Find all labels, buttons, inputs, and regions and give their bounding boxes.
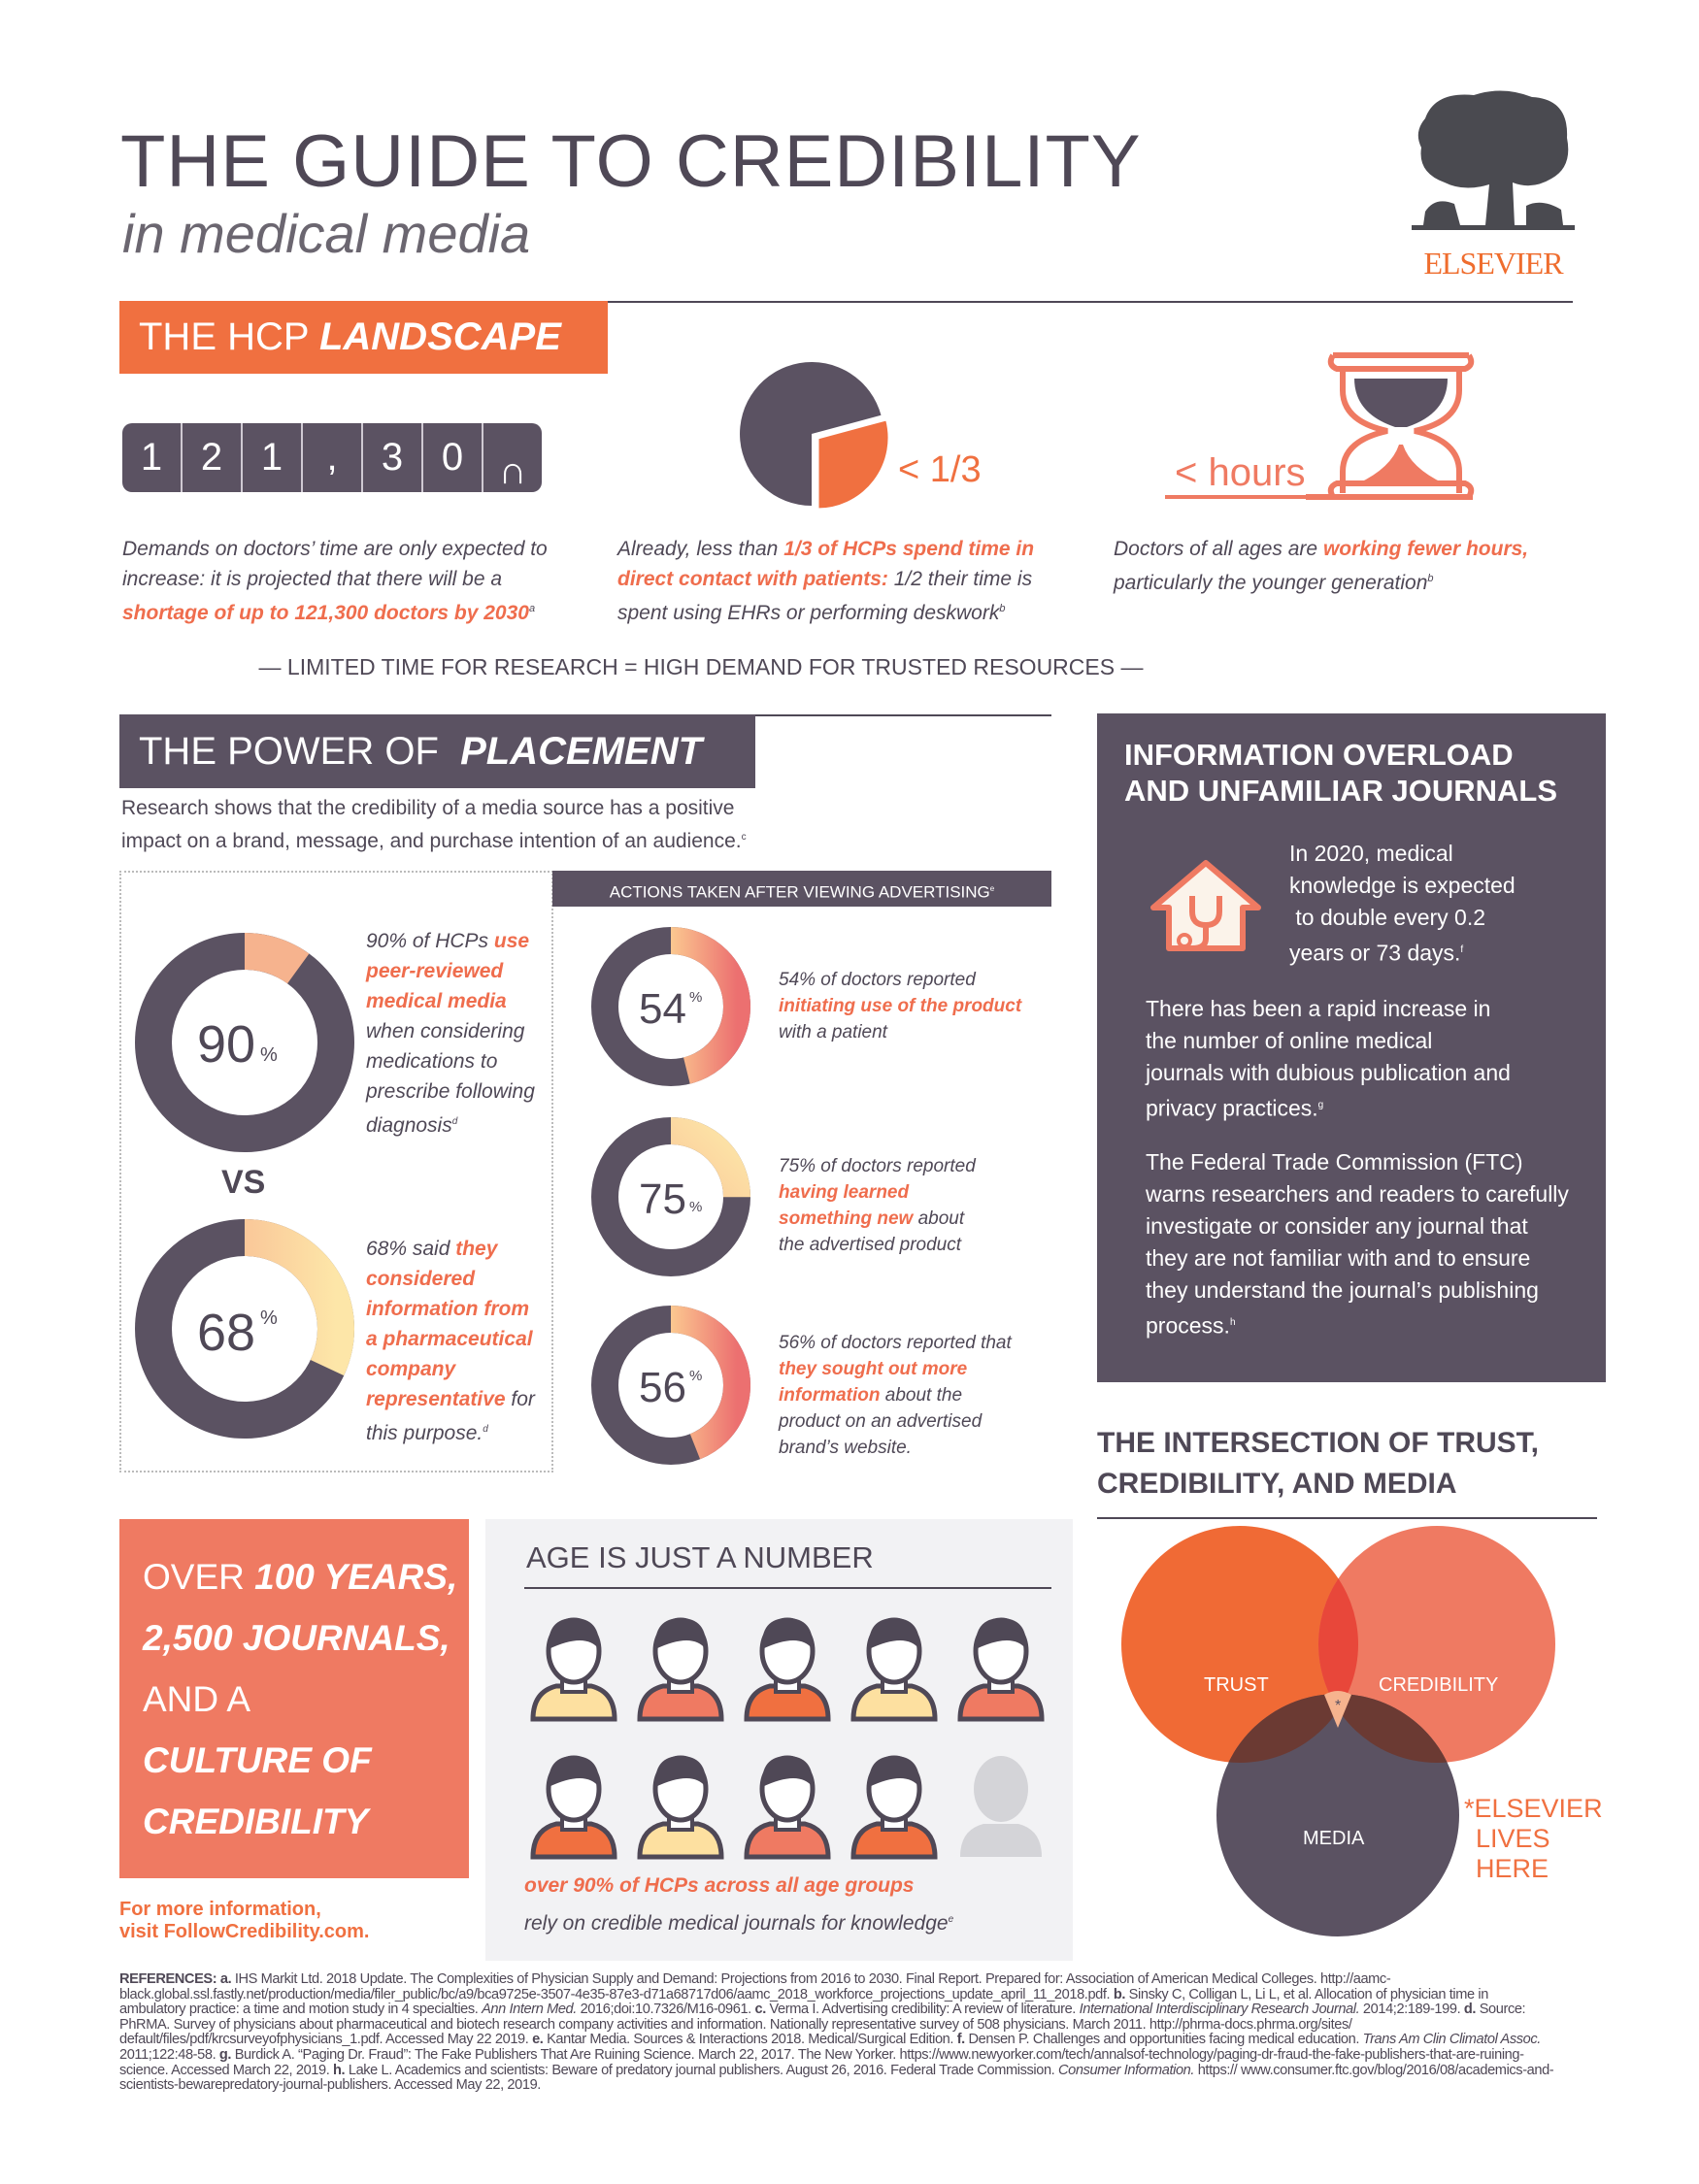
counter: 121,300: ,	[326, 436, 338, 479]
venn diagram	[1121, 1526, 1603, 1936]
venn diagram: LIVES	[1476, 1824, 1550, 1853]
venn diagram: CREDIBILITY	[1379, 1674, 1498, 1696]
text: over 90%	[524, 1874, 953, 1935]
text: direct contact: Already, less than 1/3 of HCPs spend time in direct contact with patients: 1/2 their time is spent using EHRs or performing deskworkb	[617, 538, 1034, 624]
donut: 68%	[135, 1219, 354, 1439]
donut: 54%: 54	[639, 985, 686, 1033]
text: dubious journals: There has been a rapid increase in the number of online medical journals with dubious publication and privacy practices.g	[1146, 996, 1511, 1121]
panel: age is just a number	[485, 1519, 1073, 1961]
text: 56%: 56% of doctors reported that they sought out more information about the product on an advertised brand’s website.	[779, 1333, 1012, 1458]
venn diagram: *ELSEVIER	[1464, 1794, 1603, 1823]
venn diagram: HERE	[1476, 1854, 1549, 1883]
header: actions taken: ACTIONS TAKEN AFTER VIEWING ADVERTISINGe	[610, 883, 994, 902]
heading: information overload: AND UNFAMILIAR JOURNALS	[1124, 774, 1557, 808]
text: fewer hours: Doctors of all ages are working fewer hours, particularly the younger generationb	[1114, 538, 1528, 594]
donut: 68%: 68	[197, 1304, 255, 1362]
donut: 56%	[591, 1306, 750, 1465]
subtitle: in medical media	[122, 203, 530, 264]
counter: 121,300: 1	[141, 436, 162, 479]
heading: information overload: INFORMATION OVERLOAD	[1124, 738, 1514, 772]
counter: 121,300: 2	[201, 436, 222, 479]
counter: 121,300: 0	[442, 436, 463, 479]
label: vs: VS	[221, 1164, 265, 1201]
banner: the hcp landscape: THE HCP LANDSCAPE	[139, 315, 561, 358]
banner: the hcp landscape	[119, 301, 608, 374]
banner: power of placement: THE POWER OF PLACEMENT	[139, 730, 702, 773]
panel: information overload	[1097, 713, 1606, 1382]
panel: over 100 years	[119, 1519, 469, 1878]
donut: 68%: %	[260, 1307, 278, 1329]
donut: 75%: 75	[639, 1175, 686, 1223]
donut: 90%: %	[260, 1044, 278, 1066]
venn diagram: *	[1335, 1698, 1341, 1714]
text: 90%: 90% of HCPs use peer-reviewed medical media when considering medications to prescribe following diagnosisd	[366, 930, 535, 1137]
text: more info: For more information,	[119, 1899, 321, 1920]
text: more info: visit FollowCredibility.com.	[119, 1921, 369, 1942]
panel: over 100 years: OVER 100 YEARS,	[143, 1557, 457, 1597]
icon: hourglass with less hours	[1165, 352, 1474, 500]
donut: 90%	[135, 933, 354, 1152]
heading: intersection: THE INTERSECTION OF TRUST, CREDIBILITY, AND MEDIA	[1097, 1427, 1539, 1500]
logo: elsevier: ELSEVIER	[1423, 246, 1563, 281]
counter: 121,300	[122, 423, 542, 492]
panel: over 100 years: CREDIBILITY	[143, 1802, 368, 1841]
icon: house with stethoscope	[1150, 860, 1261, 951]
text: ftc warning: The Federal Trade Commission (FTC) warns researchers and readers to carefully investigate or consider any journal that they are not familiar with and to ensure they understand the journal’s publishing process.h	[1146, 1149, 1569, 1339]
heading: age: AGE IS JUST A NUMBER	[526, 1540, 874, 1574]
text: over 90%: rely on credible medical journals for knowledgee	[524, 1912, 953, 1935]
donut: 56%: 56	[639, 1364, 686, 1411]
text: doctor shortage: Demands on doctors’ time are only expected to increase: it is projected that there will be a shortage of up to 121,300 doctors by 2030a	[122, 538, 548, 624]
tagline: — LIMITED TIME FOR RESEARCH = HIGH DEMAND FOR TRUSTED RESOURCES —	[259, 654, 1143, 679]
text: over 90%: over 90% of HCPs across all age groups	[524, 1874, 914, 1897]
text: research intro: Research shows that the credibility of a media source has a positive impact on a brand, message, and purchase intention of an audience.c	[121, 797, 747, 852]
panel: 90 vs 68	[119, 871, 553, 1473]
donut: 54%: %	[689, 989, 702, 1006]
donut: 75%: %	[689, 1199, 702, 1215]
venn diagram: MEDIA	[1303, 1828, 1365, 1849]
icon: hourglass with less hours: < hours	[1175, 451, 1306, 494]
donut: 75%	[591, 1117, 750, 1276]
logo: elsevier	[1412, 91, 1575, 281]
pie chart: less than 1/3	[740, 362, 981, 509]
text: knowledge doubling: In 2020, medical knowledge is expected to double every 0.2 years or 73 days.f	[1289, 841, 1516, 966]
counter: 121,300: 1	[261, 436, 283, 479]
text: 54%: 54% of doctors reported initiating use of the product with a patient	[779, 970, 1021, 1042]
donut: 56%: %	[689, 1368, 702, 1384]
venn diagram: TRUST	[1204, 1674, 1269, 1696]
counter: 121,300: 3	[382, 436, 403, 479]
panel: over 100 years: 2,500 JOURNALS,	[143, 1618, 450, 1658]
donut: 54%	[591, 927, 750, 1086]
icons: people	[530, 1617, 1045, 1860]
counter: 121,300: ∩	[499, 449, 526, 492]
heading: information overload	[1124, 738, 1557, 808]
banner: power of placement	[119, 714, 755, 788]
pie chart: less than 1/3: < 1/3	[898, 449, 981, 490]
text: more info	[119, 1899, 369, 1942]
text: 68%: 68% said they considered information from a pharmaceutical company representative for this purpose.d	[366, 1238, 535, 1444]
panel: over 100 years: AND A	[143, 1679, 250, 1719]
header: actions taken	[552, 871, 1051, 907]
donut: 90%: 90	[197, 1015, 255, 1074]
panel: over 100 years: CULTURE OF	[143, 1740, 372, 1780]
title: THE GUIDE TO CREDIBILITY	[120, 120, 1142, 203]
text: 75%: 75% of doctors reported having learned something new about the advertised product	[779, 1156, 976, 1255]
references: REFERENCES: a. IHS Markit Ltd. 2018 Update. The Complexities of Physician Supply and Demand: Projections from 2016 to 2030. Final Report. Prepared for: Association of American Medical Colleges. http://aamc-black.global.ssl.fastly.net/production/media/filer_public/bc/a9/bca9725e-3507-4e35-87e3-d71a68717d06/aamc_2018_workforce_projections_update_april_11_2018.pdf. b. Sinsky C, Colligan L, Li L, et al. Allocation of physician time in ambulatory practice: a time and motion study in 4 specialties. Ann Intern Med. 2016;doi:10.7326/M16-0961. c. Verma I. Advertising credibility: A review of literature. International Interdisciplinary Research Journal. 2014;2:189-199. d. Source: PhRMA. Survey of physicians about pharmaceutical and biotech research company activities and information. Nationally representative survey of 508 physicians. March 2011. http://phrma-docs.phrma.org/sites/ default/files/pdf/krcsurveyofphysicians_1.pdf. Accessed May 22 2019. e. Kantar Media. Sources & Interactions 2018. Medical/Surgical Edition. f. Densen P. Challenges and opportunities facing medical education. Trans Am Clin Climatol Assoc. 2011;122:48-58. g. Burdick A. “Paging Dr. Fraud”: The Fake Publishers That Are Ruining Science. March 22, 2017. The New Yorker. https://www.newyorker.com/tech/annalsof-technology/paging-dr-fraud-the-fake-publishers-that-are-ruining-science. Accessed March 22, 2019. h. Lake L. Academics and scientists: Beware of predatory journal publishers. August 26, 2016. Federal Trade Commission. Consumer Information. https:// www.consumer.ftc.gov/blog/2016/08/academics-and-scientists-bewarepredatory-journal-publishers. Accessed May 22, 2019.	[119, 1971, 1553, 2093]
